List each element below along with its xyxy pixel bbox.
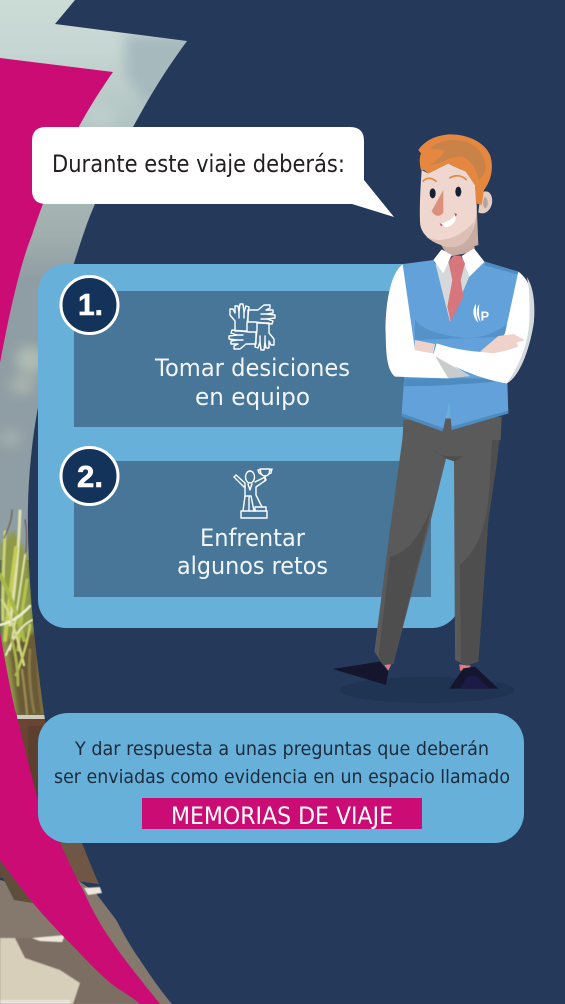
ear [478,191,492,213]
badge 1: 1. [78,287,103,322]
body text line 2: ser enviadas como evidencia en un espacio llamado [54,766,510,788]
eyebrows [423,178,437,182]
pink accent bottom [0,633,160,1004]
right hand [480,334,525,353]
card 2 text line 2: algunos retos [177,552,328,580]
shirt front [435,262,485,323]
hair [418,134,492,205]
badge 2: 2. [77,459,103,494]
tie [447,256,465,322]
icon: joined hands [229,304,275,350]
card 1 text line 2: en equipo [195,383,310,411]
eyes [430,188,436,198]
nose [432,190,443,216]
trousers and shoes [333,420,502,689]
pink accent top [0,58,113,363]
torso and arms [386,232,534,440]
panel: memorias de viaje [38,713,524,843]
card 2 text: Enfrentar [200,524,305,552]
ground shadow [340,677,514,703]
face [420,163,477,247]
grass [0,510,46,716]
badge 1 [61,276,118,334]
vest [402,260,518,430]
neck shadow [443,205,478,253]
logo [473,304,490,323]
smile [442,213,456,227]
paving [0,875,180,1004]
logo: P [481,309,490,323]
character: man with crossed arms [333,134,534,703]
body text line 1: Y dar respuesta a unas preguntas que deberán [74,738,489,760]
badge 2 [61,448,118,504]
wooden planter [0,718,70,878]
icon: winner with trophy [234,469,272,518]
collar [433,249,452,273]
card 2 [74,461,431,597]
left hand [414,340,435,353]
card 1 [74,291,431,427]
bubble text: Durante este viaje deberás: [52,150,345,178]
memorias label: MEMORIAS DE VIAJE [171,802,393,830]
panel: tasks [38,264,460,628]
trouser top [403,417,502,440]
head [418,134,492,253]
background photo [0,0,200,1004]
light paving patch [0,887,150,1004]
card 1 text: Tomar desiciones [154,354,350,382]
speech bubble [32,127,394,217]
neck [440,232,475,257]
left sleeve [386,264,470,378]
shirt shadow [435,356,470,378]
right sleeve [433,272,534,383]
